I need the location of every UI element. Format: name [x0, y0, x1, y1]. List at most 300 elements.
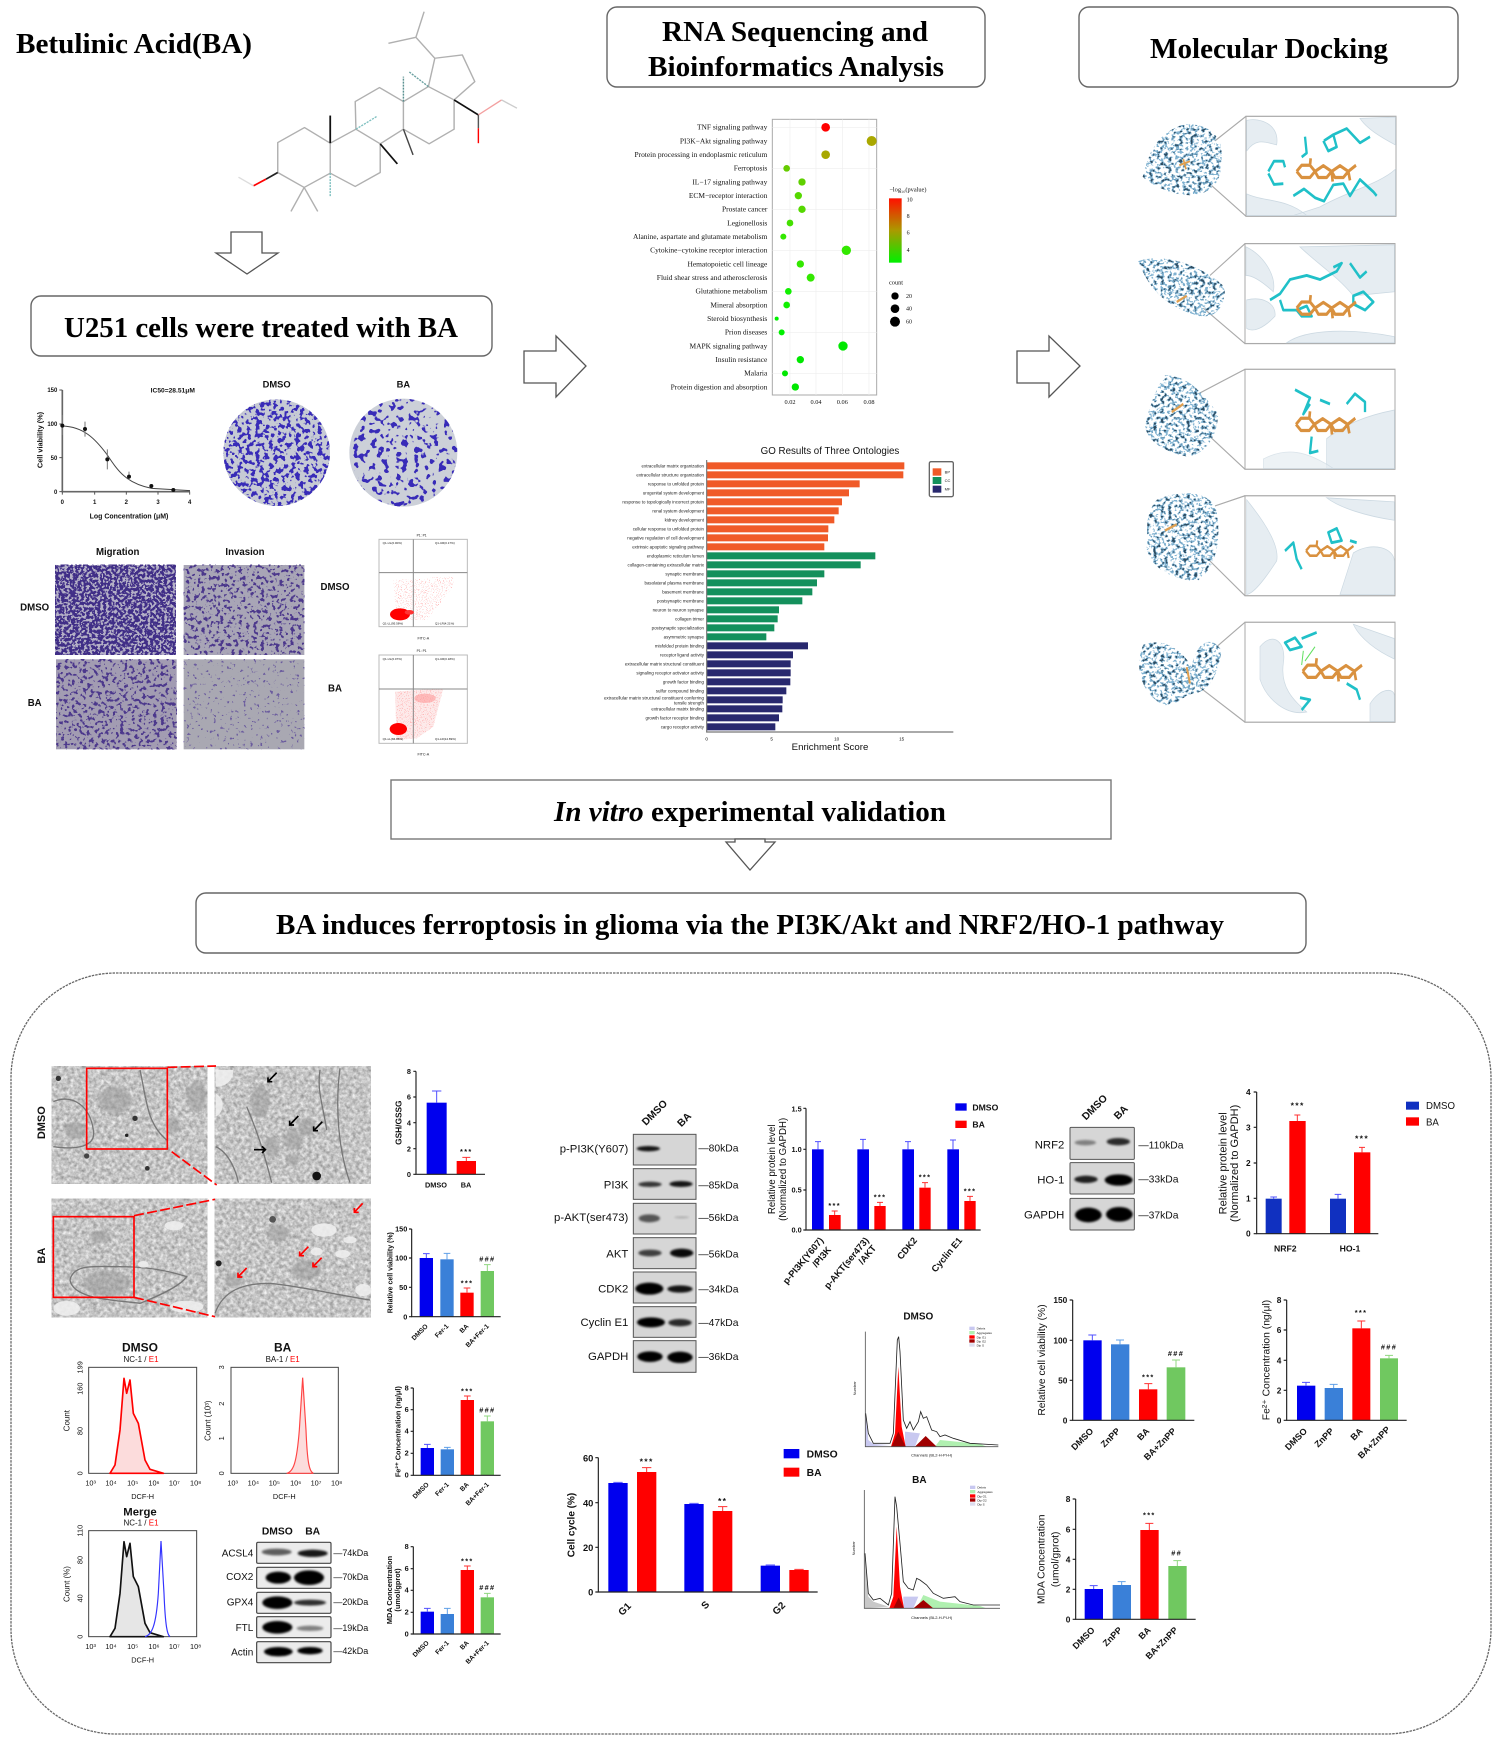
- chart: KEGG dot plot: Insulin resistance: [715, 355, 768, 364]
- legend: ontologies: CC: [945, 478, 951, 483]
- bar chart: cell cycle: Cell cycle (%): [567, 1493, 578, 1557]
- bar chart: viability with Fer-1: BA+Fer-1: [465, 1323, 491, 1349]
- chart: GO enrichment bars: extrinsic apoptotic signaling pathway: [632, 544, 705, 549]
- bar chart: viability with Fer-1: BA: [459, 1323, 471, 1335]
- histogram: merge: NC-1 / E1: [123, 1518, 159, 1527]
- bar chart: viability with ZnPP: ***: [1142, 1373, 1155, 1382]
- chart: KEGG dot plot: Protein processing in endoplasmic reticulum: [634, 150, 768, 159]
- micrographs: migration and invasion: DMSO: [20, 603, 50, 614]
- bar chart: PI3K/Akt protein level: Cyclin E1: [930, 1236, 964, 1274]
- chart: GO enrichment bars: kidney development: [665, 517, 705, 522]
- chart: KEGG dot plot: Protein digestion and absorption: [671, 382, 768, 391]
- histogram: DMSO: 80: [76, 1427, 85, 1435]
- legend: BA cell-cycle stages: Debris: [977, 1486, 986, 1490]
- chart: IC50 curve: 3: [156, 500, 160, 506]
- heading box: molecular docking: [1079, 7, 1458, 87]
- bar chart: PI3K/Akt protein level: (Normalized to GAPDH): [778, 1118, 789, 1221]
- heading box: U251 cells: U251 cells were treated with BA: [64, 313, 459, 344]
- legend: colour scale: 8: [907, 214, 910, 220]
- chart: KEGG dot plot: Steroid biosynthesis: [707, 314, 767, 323]
- legend: BA cell-cycle stages: Dip G2: [977, 1498, 987, 1502]
- chart: GO enrichment bars: extracellular matrix structural constituent: [625, 661, 705, 666]
- bar chart: GSH/GSSG: ***: [460, 1147, 473, 1156]
- colony plate: DMSO: DMSO: [263, 379, 291, 389]
- chart: GO enrichment bars: tensile strength: [674, 700, 705, 705]
- western blot: PI3K/Akt: —80kDa: [698, 1144, 739, 1155]
- chart: GO enrichment bars: 15: [899, 737, 905, 742]
- bar chart: PI3K/Akt protein level: p-PI3K(Y607): [781, 1236, 826, 1286]
- bar chart: MDA with ZnPP: MDA Concentration: [1036, 1514, 1047, 1604]
- chart: GO enrichment bars: misfolded protein binding: [655, 643, 705, 648]
- docking pose 4: [1147, 493, 1395, 596]
- electron micrographs: BA: [36, 1248, 48, 1264]
- histogram: BA: 10⁷: [311, 1479, 322, 1488]
- colony plate: BA: BA: [397, 379, 410, 389]
- western blot: ferroptosis markers: [222, 1527, 368, 1663]
- legend: NRF2 chart: [1406, 1101, 1455, 1128]
- legend: NRF2 chart: DMSO: [1426, 1101, 1455, 1112]
- bar chart: Fe2+ with ZnPP: 8: [1277, 1295, 1282, 1305]
- bar chart: viability with ZnPP: 50: [1058, 1375, 1068, 1385]
- legend: DMSO cell-cycle stages: Debris: [977, 1327, 986, 1331]
- bar chart: viability with Fer-1: 150: [395, 1225, 407, 1234]
- arrow: RNA sequencing to docking: [1017, 336, 1080, 397]
- bar chart: Fe2+ with ZnPP: Fe²⁺ Concentration (ng/μl): [1261, 1300, 1272, 1420]
- panel: molecular docking poses: [1138, 116, 1396, 722]
- bar chart: MDA with Fer-1: Fer-1: [434, 1640, 451, 1656]
- legend: DMSO cell-cycle stages: [969, 1327, 992, 1347]
- heading box: in vitro validation: [391, 780, 1111, 839]
- chart: KEGG dot plot: Mineral absorption: [710, 300, 768, 309]
- bar chart: NRF2/HO-1 protein level: ***: [1355, 1134, 1369, 1144]
- legend: DMSO cell-cycle stages: Dip G1: [977, 1335, 986, 1339]
- histogram: DMSO: [62, 1340, 201, 1501]
- bar chart: Fe2+ with ZnPP: ***: [1355, 1308, 1367, 1317]
- histogram: merge: 110: [76, 1525, 85, 1537]
- western blot: PI3K/Akt: —47kDa: [698, 1318, 739, 1329]
- histogram: DMSO: 10⁶: [148, 1479, 160, 1488]
- docking pose 3: [1145, 369, 1395, 469]
- histogram: cell cycle DMSO: Channels (BL2-H-PI-H): [911, 1453, 953, 1458]
- bar chart: Fe2+ with Fer-1: BA+Fer-1: [465, 1481, 491, 1507]
- histogram: merge: 80: [76, 1556, 85, 1564]
- bar chart: MDA with ZnPP: ZnPP: [1101, 1625, 1124, 1648]
- bar chart: viability with Fer-1: 50: [399, 1283, 407, 1292]
- heading box: U251 cells: [31, 296, 492, 356]
- panel: experimental results: [11, 973, 1491, 1734]
- western blot: PI3K/Akt: GAPDH: [588, 1351, 628, 1363]
- chart: GO enrichment bars: synaptic membrane: [665, 571, 705, 576]
- bar chart: cell cycle: 60: [583, 1453, 593, 1463]
- bar chart: Fe2+ with ZnPP: ZnPP: [1312, 1426, 1336, 1449]
- chart: GO enrichment bars: extracellular matrix binding: [651, 706, 705, 711]
- bar chart: MDA with ZnPP: (umol/gprot): [1050, 1531, 1061, 1587]
- micrographs: migration and invasion: Migration: [96, 547, 139, 558]
- panel: NRF2/HO-1 blot and quantification: [1024, 1087, 1455, 1254]
- bar chart: PI3K/Akt protein level: ***: [828, 1201, 841, 1210]
- legend: colour scale: 6: [907, 231, 910, 237]
- bar chart: Fe2+ with Fer-1: ***: [461, 1387, 474, 1396]
- western blot: NRF2/HO-1: BA: [1112, 1103, 1131, 1122]
- chart: GO enrichment bars: 0: [705, 737, 708, 742]
- bar chart: Fe2+ with ZnPP: [1261, 1295, 1407, 1461]
- western blot: PI3K/Akt: BA: [676, 1111, 694, 1129]
- chart: IC50 curve: 0: [54, 490, 58, 496]
- histogram: merge: 10⁵: [127, 1642, 138, 1651]
- bar chart: cell cycle: 40: [583, 1498, 593, 1508]
- histogram: DMSO: 10⁴: [105, 1479, 117, 1488]
- western blot: ferroptosis markers: —20kDa: [333, 1597, 368, 1607]
- western blot: PI3K/Akt: DMSO: [640, 1098, 670, 1128]
- bar chart: viability with ZnPP: [1037, 1295, 1194, 1462]
- bar chart: GSH/GSSG: 4: [407, 1118, 412, 1127]
- chart: KEGG dot plot: Cytokine−cytokine receptor interaction: [650, 246, 768, 255]
- legend: colour scale: 10: [907, 198, 913, 204]
- legend: colour scale: −log₁₀(pvalue): [889, 187, 926, 194]
- bar chart: viability with ZnPP: DMSO: [1069, 1426, 1095, 1452]
- histogram: DMSO: 0: [76, 1471, 85, 1475]
- legend: dot size: 20: [906, 294, 912, 300]
- bar chart: MDA with Fer-1: 8: [405, 1542, 409, 1551]
- flow plot: apoptosis BA: Q1-LL(84.86%): [383, 737, 403, 741]
- chart: GO enrichment bars: growth factor binding: [663, 679, 705, 684]
- icon: betulinic acid molecule: [238, 12, 517, 211]
- chart: GO enrichment bars: collagen-containing extracellular matrix: [628, 562, 705, 567]
- bar chart: MDA with Fer-1: ###: [479, 1583, 495, 1592]
- bar chart: MDA with ZnPP: 2: [1066, 1584, 1071, 1594]
- bar chart: viability with Fer-1: 100: [395, 1254, 407, 1263]
- histogram: BA: 1: [217, 1436, 226, 1440]
- western blot: ferroptosis markers: —70kDa: [333, 1572, 368, 1582]
- western blot: ferroptosis markers: —42kDa: [333, 1646, 368, 1656]
- chart: KEGG dot plot: Glutathione metabolism: [696, 287, 768, 296]
- western blot: PI3K/Akt: AKT: [606, 1248, 628, 1260]
- chart: KEGG dot plot: TNF signaling pathway: [697, 123, 768, 132]
- chart: GO enrichment bars: extracellular matrix organization: [642, 463, 705, 468]
- histogram: BA: 10⁶: [290, 1479, 301, 1488]
- western blot: PI3K/Akt: Cyclin E1: [580, 1317, 628, 1329]
- bar chart: viability with ZnPP: 100: [1053, 1335, 1068, 1345]
- bar chart: MDA with ZnPP: ##: [1171, 1549, 1182, 1558]
- bar chart: PI3K/Akt protein level: 0.5: [791, 1186, 802, 1195]
- chart: IC50 curve: 150: [47, 388, 58, 394]
- histogram: BA: 10⁴: [248, 1479, 259, 1488]
- chart: GO enrichment bars: asymmetric synapse: [664, 634, 705, 639]
- western blot: ferroptosis markers: Actin: [231, 1647, 253, 1658]
- histogram: DMSO: 10⁷: [169, 1479, 180, 1488]
- bar chart: Fe2+ with ZnPP: DMSO: [1283, 1426, 1309, 1452]
- histogram: merge: 10⁸: [190, 1642, 201, 1651]
- bar chart: PI3K/Akt protein level: ***: [874, 1193, 886, 1202]
- western blot: ferroptosis markers: GPX4: [227, 1597, 254, 1608]
- bar chart: GSH/GSSG: 8: [407, 1067, 411, 1076]
- histogram: merge: Merge: [123, 1506, 157, 1518]
- bar chart: MDA with ZnPP: ***: [1143, 1510, 1156, 1519]
- chart: KEGG dot plot: 0.06: [837, 399, 848, 406]
- bar chart: NRF2/HO-1 protein level: [1218, 1087, 1455, 1254]
- bar chart: MDA with ZnPP: 8: [1066, 1494, 1071, 1504]
- legend: BA cell-cycle stages: Dip S: [977, 1502, 985, 1506]
- chart: KEGG dot plot: MAPK signaling pathway: [689, 341, 768, 350]
- bar chart: NRF2/HO-1 protein level: 0: [1246, 1229, 1251, 1239]
- chart: GO enrichment bars: response to topologically incorrect protein: [622, 499, 705, 504]
- legend: cell cycle: DMSO: [807, 1449, 838, 1460]
- bar chart: viability with ZnPP: 0: [1063, 1415, 1068, 1425]
- chart: KEGG dot plot: IL−17 signaling pathway: [692, 177, 768, 186]
- histogram: DMSO: 10⁸: [190, 1479, 201, 1488]
- chart: IC50 curve: [36, 388, 195, 521]
- bar chart: PI3K/Akt protein level: /AKT: [857, 1243, 878, 1266]
- chart: GO enrichment bars: postsynaptic membrane: [657, 598, 705, 603]
- bar chart: GSH/GSSG: GSH/GSSG: [394, 1100, 404, 1145]
- bar chart: cell cycle: 0: [588, 1588, 593, 1598]
- heading box: in vitro validation: In vitro experimental validation: [553, 797, 946, 828]
- bar chart: PI3K/Akt protein level: Relative protein level: [767, 1125, 778, 1214]
- western blot: NRF2/HO-1: GAPDH: [1024, 1209, 1064, 1221]
- western blot: PI3K/Akt: —56kDa: [698, 1249, 739, 1260]
- heading box: RNA sequencing: [607, 7, 985, 87]
- bar chart: PI3K/Akt protein level: p-AKT(ser473): [822, 1236, 871, 1291]
- colony plate: DMSO: [223, 379, 330, 506]
- bar chart: viability with Fer-1: [388, 1225, 501, 1349]
- bar chart: Fe2+ with Fer-1: DMSO: [412, 1481, 431, 1501]
- histogram: DMSO: 10⁵: [127, 1479, 138, 1488]
- western blot: ferroptosis markers: BA: [305, 1527, 321, 1538]
- western blot: NRF2/HO-1: —110kDa: [1138, 1140, 1184, 1151]
- histogram: cell cycle BA: BA: [912, 1475, 927, 1486]
- heading box: conclusion: [196, 893, 1306, 953]
- bar chart: GSH/GSSG: 6: [407, 1093, 411, 1102]
- flow plot: apoptosis DMSO: P1: P1: [417, 534, 427, 538]
- chart: KEGG dot plot: Fluid shear stress and atherosclerosis: [657, 273, 767, 282]
- chart: KEGG dot plot: Alanine, aspartate and glutamate metabolism: [633, 232, 768, 241]
- chart: KEGG dot plot: Ferroptosis: [734, 164, 767, 173]
- histogram: cell cycle BA: [851, 1475, 1000, 1620]
- bar chart: cell cycle: **: [718, 1496, 727, 1506]
- flow plot: apoptosis DMSO: Q1-UL(0.00%): [383, 541, 402, 545]
- histogram: BA: DCF-H: [273, 1492, 296, 1501]
- bar chart: MDA with ZnPP: [1036, 1494, 1196, 1661]
- bar chart: Fe2+ with Fer-1: 4: [405, 1427, 410, 1436]
- chart: GO enrichment bars: basement membrane: [662, 589, 705, 594]
- panel: U251 assays: [20, 379, 467, 756]
- legend: ontologies: MF: [945, 487, 951, 492]
- bar chart: MDA with Fer-1: 0: [405, 1629, 409, 1638]
- chart: GO enrichment bars: signaling receptor activator activity: [636, 670, 705, 675]
- histogram: merge: 0: [76, 1635, 85, 1639]
- bar chart: NRF2/HO-1 protein level: HO-1: [1340, 1244, 1361, 1254]
- flow plot: apoptosis BA: Q1-UR(0.18%): [435, 657, 455, 661]
- chart: IC50 curve: Log Concentration (μM): [90, 514, 168, 521]
- arrow: molecule to U251: [216, 232, 278, 274]
- bar chart: cell cycle: G1: [617, 1601, 634, 1618]
- chart: IC50 curve: 2: [125, 500, 129, 506]
- bar chart: PI3K/Akt protein level: ***: [964, 1186, 976, 1195]
- bar chart: NRF2/HO-1 protein level: 3: [1246, 1122, 1251, 1132]
- histogram: BA: BA-1 / E1: [266, 1355, 300, 1364]
- bar chart: Fe2+ with ZnPP: BA+ZnPP: [1356, 1424, 1392, 1461]
- chart: GO enrichment bars: [604, 446, 953, 752]
- bar chart: GSH/GSSG: BA: [461, 1180, 472, 1189]
- western blot: PI3K/Akt: PI3K: [604, 1179, 629, 1191]
- micrographs: migration and invasion: Invasion: [225, 547, 265, 558]
- histogram: BA: 10⁸: [331, 1479, 342, 1488]
- chart: GO enrichment bars: neuron to neuron synapse: [653, 607, 705, 612]
- bar chart: PI3K/Akt protein level: /PI3K: [811, 1245, 833, 1269]
- western blot: NRF2/HO-1: NRF2: [1035, 1139, 1064, 1151]
- chart: GO enrichment bars: GO Results of Three Ontologies: [761, 446, 899, 457]
- bar chart: Fe2+ with Fer-1: Fe²⁺ Concentration (ng/μl): [394, 1386, 403, 1477]
- legend: DMSO cell-cycle stages: Aggregates: [977, 1331, 992, 1335]
- legend: cell cycle: [784, 1449, 838, 1479]
- histogram: merge: 10³: [85, 1642, 97, 1651]
- chart: GO enrichment bars: growth factor receptor binding: [645, 715, 705, 720]
- chart: KEGG dot plot: PI3K−Akt signaling pathway: [680, 136, 768, 145]
- western blot: ferroptosis markers: FTL: [236, 1623, 254, 1634]
- bar chart: MDA with Fer-1: ***: [461, 1557, 474, 1566]
- histogram: BA: 10³: [227, 1479, 239, 1488]
- bar chart: MDA with Fer-1: MDA Concentration: [385, 1555, 394, 1624]
- chart: KEGG dot plot: 0.04: [810, 399, 822, 406]
- legend: dot size: 40: [906, 307, 912, 313]
- heading box: RNA sequencing: RNA Sequencing and: [662, 17, 928, 48]
- legend: PI3K chart: DMSO: [972, 1102, 999, 1112]
- bar chart: MDA with ZnPP: DMSO: [1071, 1625, 1097, 1651]
- colony plate: BA: [349, 379, 457, 507]
- flow plot: apoptosis BA: Q1-UL(0.07%): [383, 657, 402, 661]
- panel: electron microscopy and GSH: [36, 1066, 501, 1349]
- bar chart: Fe2+ with ZnPP: 6: [1277, 1325, 1282, 1335]
- chart: KEGG dot plot: 0.08: [863, 399, 875, 406]
- bar chart: cell cycle: ***: [640, 1457, 654, 1467]
- western blot: PI3K/Akt: p-AKT(ser473): [554, 1212, 629, 1224]
- chart: GO enrichment bars: response to unfolded protein: [648, 481, 705, 486]
- chart: KEGG dot plot: Hematopoietic cell lineage: [687, 259, 768, 268]
- bar chart: PI3K/Akt protein level: CDK2: [895, 1236, 919, 1261]
- micrographs: migration and invasion: BA: [28, 698, 42, 709]
- bar chart: GSH/GSSG: 0: [407, 1170, 411, 1179]
- flow plot: apoptosis BA: P1: P1: [417, 649, 427, 653]
- micrographs: migration and invasion: [20, 547, 304, 749]
- chart: GO enrichment bars: extracellular matrix structural constituent conferring: [604, 695, 705, 700]
- legend: colour scale: 4: [907, 248, 910, 254]
- chart: GO enrichment bars: negative regulation of cell development: [627, 535, 705, 540]
- histogram: DMSO: 199: [76, 1361, 85, 1373]
- flow plot: apoptosis DMSO: Q1-LR(4.21%): [435, 621, 454, 625]
- chart: IC50 curve: 100: [47, 422, 58, 428]
- bar chart: MDA with Fer-1: 4: [405, 1586, 410, 1595]
- arrow: U251 to RNA sequencing: [524, 336, 586, 397]
- chart: KEGG dot plot: 0.02: [784, 399, 796, 406]
- flow plot: apoptosis DMSO: Q1-LL(95.58%): [383, 621, 403, 625]
- legend: cell cycle: BA: [807, 1468, 822, 1479]
- flow plot: apoptosis DMSO: Q1-UR(0.17%): [435, 541, 455, 545]
- western blot: NRF2/HO-1: —37kDa: [1138, 1210, 1179, 1221]
- bar chart: PI3K/Akt protein level: 1.0: [791, 1145, 802, 1154]
- bar chart: MDA with Fer-1: DMSO: [412, 1640, 431, 1659]
- heading box: RNA sequencing: Bioinformatics Analysis: [648, 52, 944, 83]
- western blot: NRF2/HO-1: DMSO: [1080, 1093, 1110, 1123]
- legend: ontologies: [929, 462, 953, 497]
- flow plot: apoptosis DMSO: [321, 534, 467, 640]
- bar chart: MDA with Fer-1: (umol/gprot): [393, 1568, 402, 1612]
- bar chart: MDA with Fer-1: BA+Fer-1: [465, 1640, 491, 1666]
- legend: BA cell-cycle stages: Dip G1: [977, 1494, 987, 1498]
- histogram: merge: 40: [76, 1594, 85, 1602]
- western blot: PI3K/Akt: CDK2: [598, 1283, 628, 1295]
- bar chart: viability with Fer-1: 0: [403, 1312, 407, 1321]
- chart: IC50 curve: IC50=28.51μM: [151, 388, 195, 395]
- heading box: conclusion: BA induces ferroptosis in glioma via the PI3K/Akt and NRF2/HO-1 pathway: [276, 910, 1224, 941]
- histogram: merge: 10⁷: [169, 1642, 180, 1651]
- bar chart: MDA with Fer-1: 6: [405, 1564, 409, 1573]
- bar chart: NRF2/HO-1 protein level: NRF2: [1274, 1244, 1297, 1254]
- bar chart: NRF2/HO-1 protein level: ***: [1291, 1100, 1305, 1110]
- chart: IC50 curve: 1: [93, 500, 97, 506]
- chart: GO enrichment bars: collagen trimer: [675, 616, 705, 621]
- bar chart: MDA with Fer-1: [385, 1542, 501, 1666]
- western blot: PI3K/Akt: —36kDa: [698, 1352, 739, 1363]
- western blot: PI3K/Akt: —85kDa: [698, 1180, 739, 1191]
- docking pose 1: [1143, 116, 1396, 216]
- electron micrographs: DMSO: [36, 1106, 48, 1139]
- bar chart: NRF2/HO-1 protein level: Relative protein level: [1218, 1112, 1230, 1214]
- bar chart: Fe2+ with Fer-1: 6: [405, 1405, 409, 1414]
- bar chart: NRF2/HO-1 protein level: 4: [1246, 1087, 1251, 1097]
- chart: GO enrichment bars: endoplasmic reticulum lumen: [647, 553, 705, 558]
- histogram: cell cycle BA: Channels (BL2-H-PI-H): [911, 1615, 953, 1620]
- panel: cell cycle: [567, 1311, 1000, 1620]
- bar chart: cell cycle: [567, 1449, 838, 1618]
- chart: KEGG dot plot: Prostate cancer: [722, 205, 768, 214]
- chart: GO enrichment bars: cellular response to unfolded protein: [633, 526, 705, 531]
- docking pose 5: [1139, 622, 1395, 722]
- bar chart: Fe2+ with ZnPP: 0: [1277, 1415, 1282, 1425]
- legend: PI3K chart: [955, 1102, 999, 1129]
- bar chart: Fe2+ with Fer-1: 8: [405, 1383, 409, 1392]
- bar chart: MDA with ZnPP: BA+ZnPP: [1144, 1625, 1180, 1661]
- arrow: validation to conclusion: [726, 839, 775, 870]
- histogram: cell cycle BA: Number: [851, 1541, 856, 1555]
- bar chart: MDA with ZnPP: BA: [1136, 1625, 1153, 1641]
- docking pose 2: [1138, 244, 1395, 344]
- histogram: merge: [62, 1506, 201, 1664]
- chart: IC50 curve: 4: [188, 500, 192, 506]
- bar chart: PI3K/Akt protein level: ***: [919, 1173, 931, 1182]
- histogram: BA: 0: [217, 1471, 226, 1475]
- legend: dot size: 60: [906, 320, 912, 326]
- bar chart: viability with ZnPP: BA+ZnPP: [1142, 1426, 1178, 1462]
- legend: BA cell-cycle stages: Aggregates: [977, 1490, 993, 1494]
- flow plot: apoptosis DMSO: FITC-A: [417, 636, 430, 640]
- chart: GO enrichment bars: cargo receptor activity: [661, 724, 705, 729]
- histogram: BA: 2: [217, 1402, 226, 1406]
- bar chart: cell cycle: 20: [583, 1543, 593, 1553]
- bar chart: viability with Fer-1: ###: [479, 1254, 495, 1263]
- legend: NRF2 chart: BA: [1426, 1117, 1439, 1128]
- legend: dot size: [889, 280, 912, 327]
- chart: KEGG dot plot: [633, 119, 926, 406]
- bar chart: Fe2+ with Fer-1: Fer-1: [434, 1481, 451, 1498]
- flow plot: apoptosis BA: BA: [328, 684, 342, 695]
- bar chart: PI3K/Akt protein level: [767, 1102, 999, 1291]
- panel: PI3K/Akt blot and quantification: [554, 1098, 999, 1372]
- western blot: NRF2/HO-1: HO-1: [1037, 1174, 1064, 1186]
- histogram: merge: DCF-H: [131, 1655, 154, 1664]
- chart: GO enrichment bars: Enrichment Score: [792, 742, 868, 752]
- chart: KEGG dot plot: ECM−receptor interaction: [689, 191, 768, 200]
- histogram: DMSO: Count: [62, 1409, 71, 1431]
